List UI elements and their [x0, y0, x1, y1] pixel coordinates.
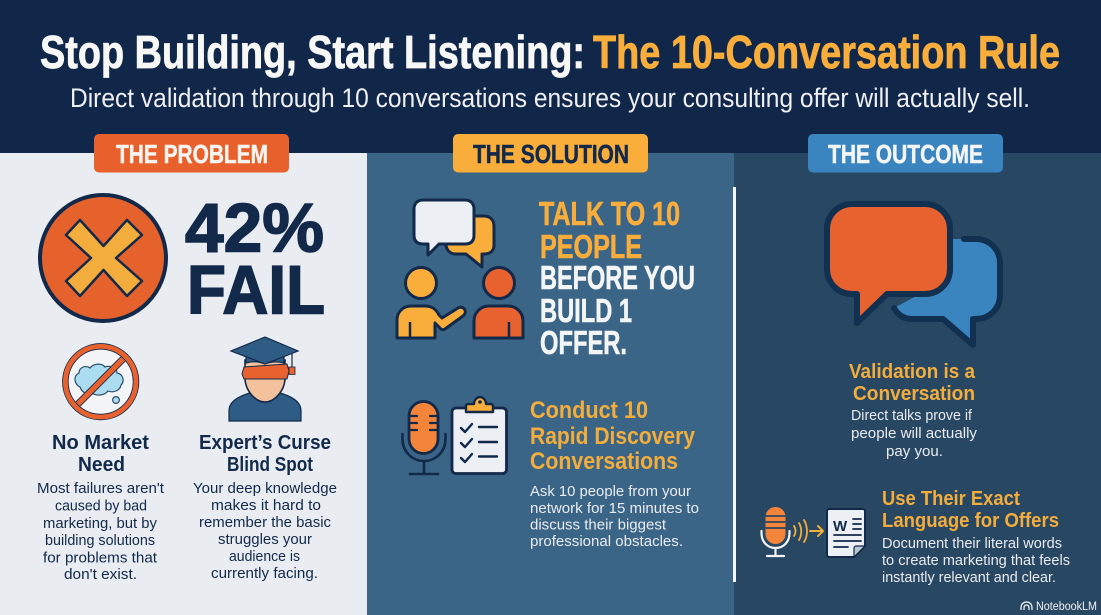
- badge: the solution: THE SOLUTION: [473, 139, 629, 169]
- headline: talk to 10 people before you build 1 offer: PEOPLE: [540, 228, 642, 265]
- icon: microphone: [402, 402, 446, 474]
- text: no market need body: don't exist.: [64, 567, 137, 583]
- heading: no market need: [52, 432, 149, 476]
- heading: use their exact language for offers: Use Their Exact: [882, 488, 1020, 510]
- headline: talk to 10 people before you build 1 offer: TALK TO 10: [539, 195, 680, 232]
- icon: clipboard checklist: [452, 397, 506, 474]
- text: discovery conversations body: Ask 10 people from your: [530, 484, 691, 500]
- text: expert's curse body: struggles your: [218, 532, 312, 548]
- title: Stop Building, Start Listening:: [40, 26, 585, 78]
- badge: the problem: THE PROBLEM: [116, 139, 268, 169]
- headline: talk to 10 people before you build 1 offer: BEFORE YOU: [540, 259, 695, 296]
- heading: conduct 10 rapid discovery conversations: Rapid Discovery: [530, 423, 696, 450]
- badge: the outcome: THE OUTCOME: [828, 139, 983, 169]
- heading: expert's curse blind spot: [199, 432, 331, 476]
- text: expert's curse body: [193, 481, 337, 582]
- text: validation body: Direct talks prove if: [851, 408, 973, 424]
- statistic: 42% fail: FAIL: [187, 252, 325, 328]
- text: exact language body: instantly relevant and clear.: [882, 570, 1056, 586]
- panel: the solution: [367, 134, 734, 615]
- text: discovery conversations body: professional obstacles.: [530, 534, 683, 550]
- badge: the solution: [453, 134, 648, 172]
- header band: [0, 0, 1101, 153]
- text: discovery conversations body: network for 15 minutes to: [530, 501, 699, 517]
- watermark: notebooklm: NotebookLM: [1036, 601, 1097, 613]
- icon: microphone to document: W: [833, 518, 848, 535]
- heading: no market need: No Market: [52, 432, 149, 454]
- icon: blindfolded graduate: [229, 337, 301, 421]
- headline: talk to 10 people before you build 1 offer: OFFER.: [540, 324, 627, 361]
- headline: talk to 10 people before you build 1 offer: [539, 195, 695, 361]
- text: no market need body: Most failures aren't: [37, 481, 164, 497]
- heading: conduct 10 rapid discovery conversations: Conversations: [530, 448, 678, 475]
- text: validation body: [851, 408, 978, 460]
- icon: two speech bubbles: [827, 204, 1000, 345]
- text: exact language body: [882, 536, 1070, 586]
- heading: no market need: Need: [78, 454, 125, 476]
- text: expert's curse body: audience is: [229, 549, 300, 565]
- heading: use their exact language for offers: Language for Offers: [882, 510, 1059, 532]
- heading: conduct 10 rapid discovery conversations: Conduct 10: [530, 397, 648, 424]
- headline: talk to 10 people before you build 1 offer: BUILD 1: [540, 292, 632, 329]
- text: exact language body: Document their literal words: [882, 536, 1062, 552]
- heading: expert's curse blind spot: Expert’s Curse: [199, 432, 331, 454]
- badge: the outcome: [808, 134, 1003, 172]
- title: [40, 26, 1060, 78]
- text: exact language body: to create marketing that feels: [882, 553, 1070, 569]
- heading: conduct 10 rapid discovery conversations: [530, 397, 696, 475]
- text: expert's curse body: Your deep knowledge: [193, 481, 337, 497]
- text: validation body: people will actually: [851, 426, 978, 442]
- subtitle: Direct validation through 10 conversations ensures your consulting offer will actually sell.: [70, 83, 1030, 113]
- heading: validation is a conversation: [849, 361, 976, 405]
- icon: two people talking: [397, 200, 523, 338]
- text: expert's curse body: makes it hard to: [211, 498, 321, 514]
- text: no market need body: for problems that: [43, 550, 157, 566]
- text: validation body: pay you.: [886, 444, 943, 460]
- text: no market need body: [37, 481, 164, 583]
- badge: the problem: [94, 134, 289, 172]
- heading: validation is a conversation: Conversation: [853, 383, 975, 405]
- text: expert's curse body: remember the basic: [199, 515, 331, 531]
- text: expert's curse body: currently facing.: [211, 566, 318, 582]
- text: no market need body: caused by bad: [55, 498, 147, 514]
- icon: microphone to document: [762, 507, 865, 557]
- heading: expert's curse blind spot: Blind Spot: [227, 454, 313, 476]
- heading: validation is a conversation: Validation is a: [849, 361, 976, 383]
- icon: x in circle: [40, 195, 166, 321]
- divider: white vertical line: [733, 187, 736, 582]
- icon: no thought cloud: [65, 346, 136, 417]
- heading: use their exact language for offers: [882, 488, 1059, 532]
- statistic: 42% fail: 42%: [185, 190, 324, 266]
- panel: the problem: [0, 134, 367, 615]
- panel: the outcome: [734, 134, 1101, 615]
- statistic: 42% fail: [185, 190, 325, 328]
- text: discovery conversations body: [530, 484, 699, 550]
- text: discovery conversations body: discuss their biggest: [530, 518, 666, 534]
- text: no market need body: building solutions: [45, 533, 155, 549]
- text: no market need body: marketing, but by: [43, 516, 158, 532]
